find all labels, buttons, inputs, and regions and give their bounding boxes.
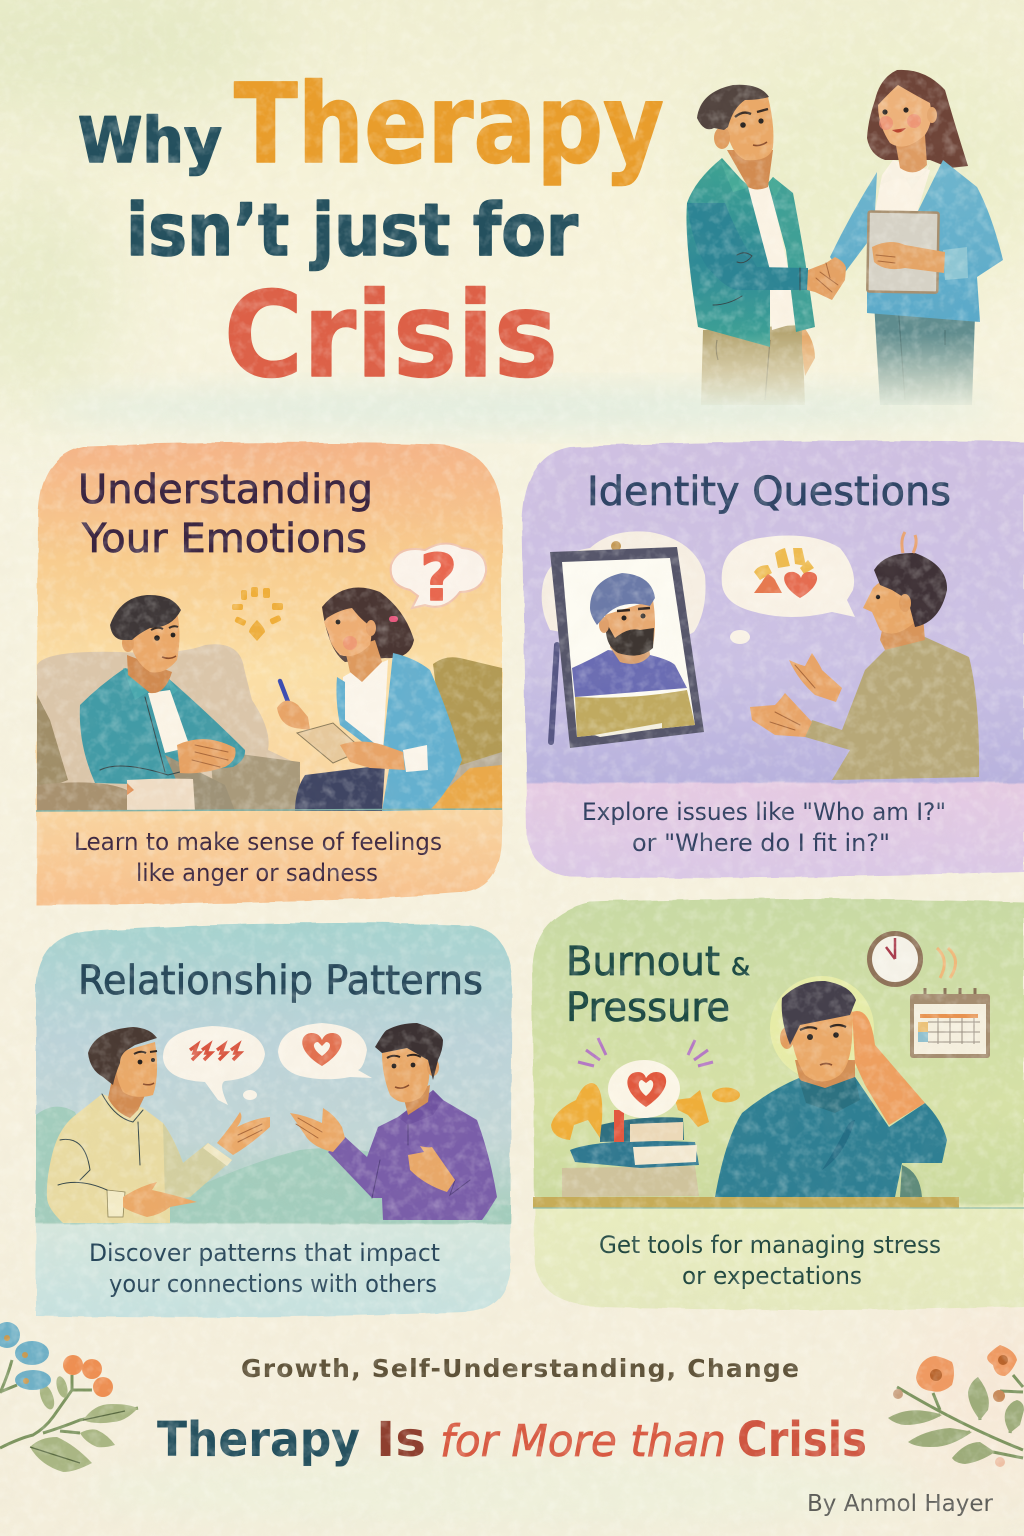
title word: Therapy: Therapy: [234, 60, 664, 188]
heading: [78, 467, 373, 562]
title line: isn't just for: isn’t just for: [126, 188, 578, 272]
books and heart: [551, 1038, 740, 1197]
heading: Pressure: [566, 985, 730, 1031]
heading: &: [731, 953, 750, 981]
mirror: [550, 541, 704, 748]
heading: Relationship Patterns: [78, 958, 483, 1004]
title word: Why: Why: [78, 104, 222, 177]
caption: [582, 798, 946, 857]
card background: [36, 923, 512, 1317]
speech bubble: marks: [163, 1026, 265, 1105]
caption: [74, 828, 442, 887]
desk: [533, 1197, 959, 1208]
reflection portrait: [572, 573, 695, 737]
woman with notebook: [277, 587, 462, 811]
card background: [532, 898, 1024, 1310]
floral decoration right: [888, 1345, 1024, 1467]
man looking in mirror: [750, 532, 979, 780]
caption: Learn to make sense of feelings: [74, 828, 442, 856]
sofa: [37, 644, 502, 811]
tagline: Growth, Self-Understanding, Change: [241, 1354, 799, 1383]
heading: Burnout: [566, 939, 720, 985]
floral decoration left: [0, 1322, 138, 1472]
words: for More than: for More than: [440, 1416, 726, 1467]
word: Therapy: Therapy: [157, 1412, 360, 1468]
card background: [522, 441, 1024, 878]
calendar: [910, 988, 990, 1058]
heading: [566, 939, 750, 1031]
wall clock: [867, 931, 923, 987]
speech bubble with question mark: ?: [420, 542, 457, 616]
thought cloud behind mirror: [542, 531, 706, 650]
caption: [89, 1239, 440, 1298]
speech bubble: heart: [278, 1023, 372, 1079]
light bulb rays: [232, 587, 283, 641]
caption: like anger or sadness: [136, 859, 378, 887]
heading: Identity Questions: [587, 469, 951, 515]
heading: Understanding: [78, 467, 373, 513]
panel: identity questions: [522, 441, 1024, 878]
caption: Explore issues like "Who am I?": [582, 798, 946, 826]
thought bubble with symbols: [722, 536, 855, 644]
card background: [36, 443, 502, 905]
illustration: two people talking: [36, 1023, 511, 1223]
heat squiggles: [937, 948, 956, 978]
word: Crisis: Crisis: [737, 1412, 867, 1468]
illustration: tired person at desk: [533, 931, 1024, 1208]
man on sofa: [80, 595, 245, 811]
hills: [36, 1107, 511, 1222]
man in teal jacket: [686, 85, 815, 405]
caption: or expectations: [682, 1262, 862, 1290]
panel: burnout and pressure: [532, 898, 1024, 1310]
title word: Crisis: Crisis: [224, 266, 558, 404]
caption: Get tools for managing stress: [599, 1231, 941, 1259]
title: [78, 60, 664, 404]
byline: By Anmol Hayer: [807, 1491, 994, 1517]
caption: or "Where do I fit in?": [632, 829, 890, 857]
man in purple shirt: [290, 1023, 497, 1220]
panel: understanding your emotions: [36, 443, 502, 905]
tired man: [715, 981, 947, 1197]
handshake hands: [807, 257, 846, 300]
caption: Discover patterns that impact: [89, 1239, 440, 1267]
word: Is: Is: [376, 1412, 426, 1468]
heading: Your Emotions: [81, 516, 367, 562]
man in yellow sweater: [47, 1027, 270, 1223]
floor line: [36, 809, 502, 811]
caption: [599, 1231, 941, 1290]
caption: your connections with others: [109, 1270, 437, 1298]
speech bubble with question mark: [391, 542, 486, 616]
illustration: handshake: [686, 70, 1003, 405]
halo: [770, 976, 874, 1080]
illustration: mirror reflection: [542, 531, 979, 780]
illustration: therapy session: [36, 542, 502, 811]
woman in blue blazer: [830, 70, 1003, 405]
closing statement: [157, 1412, 867, 1468]
panel: relationship patterns: [36, 923, 512, 1317]
